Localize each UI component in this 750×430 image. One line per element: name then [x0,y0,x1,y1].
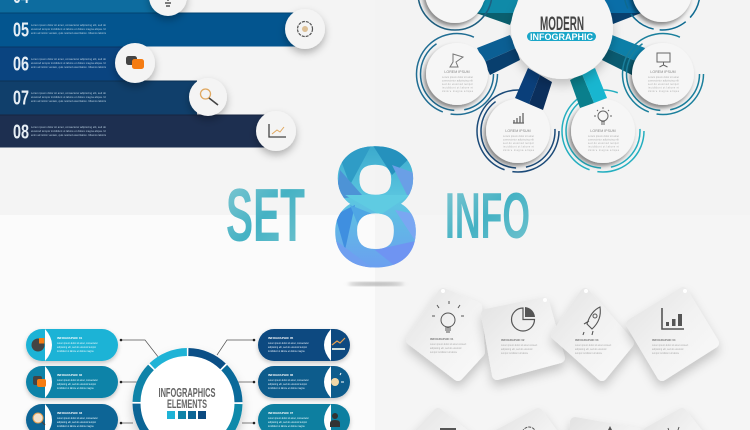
connector lines [120,339,255,424]
numeral shadow [348,282,404,286]
card 4: bar chart: adipiscing elit, sed do eiusmod [652,348,684,351]
pill 07: INFOGRAPHIC 07 [268,411,294,415]
pill 05: INFOGRAPHIC 05 [268,336,294,340]
ribbon 08: Lorem ipsum dolor sit amet, consectetur adipiscing elit, sed do [31,125,107,129]
ribbon 08: eiusmod tempor incididunt ut labore et dolore magna aliqua. Ut [31,129,106,133]
pill 07 [258,404,350,430]
card 3: rocket: adipiscing elit, sed do eiusmod [575,348,607,351]
node: top right [624,0,700,30]
headline: SET 8 INFO [227,146,529,286]
pill 06: INFOGRAPHIC 06 [268,373,294,377]
connector: top right [603,0,641,24]
node: bottom right with light bulb: incididunt ut labore et [588,146,619,148]
card 8 [648,413,703,430]
ring with title: ELEMENTS [167,397,207,411]
ribbon 07: eiusmod tempor incididunt ut labore et dolore magna aliqua. Ut [31,95,106,99]
word: INFO: INFO [445,179,530,252]
node: bottom right with light bulb: sed do eiusmod tempor [588,142,619,145]
pill 01: INFOGRAPHIC 01 [57,336,83,340]
card 2: pie chart: Lorem ipsum dolor sit amet consect [501,344,538,347]
pill 02: adipiscing elit, sed do eiusmod tempor [57,383,96,386]
ribbon 06: eiusmod tempor incididunt ut labore et dolore magna aliqua. Ut [31,61,106,65]
card 3: rocket: tempor incididunt ut labore [575,352,603,355]
panel: numbered ribbon steps [0,0,325,151]
icon: gear [285,9,325,49]
card 2: pie chart: tempor incididunt ut labore [501,352,529,355]
pill 03: Lorem ipsum dolor sit amet, consectetur [57,417,98,420]
hub: center circle with title: MODERN [540,14,584,35]
icon: line chart [256,111,296,151]
pill 01: adipiscing elit, sed do eiusmod tempor [57,346,96,349]
pill 06: incididunt ut labore et dolore magna [268,387,305,390]
card 3: rocket: Lorem ipsum dolor sit amet consect [575,344,612,347]
ribbon 06: enim ad minim veniam, quis nostrud exercitation. Ullamco laboris [31,65,107,69]
hub: center circle with title [511,0,613,79]
card 2: pie chart [486,298,560,375]
pill 03: incididunt ut labore et dolore magna [57,425,94,428]
ribbon 08 [0,114,266,148]
ribbon 06: Lorem ipsum dolor sit amet, consectetur adipiscing elit, sed do [31,57,107,61]
node: bottom right with light bulb: Lorem ipsum dolor sit amet [588,135,619,138]
icon: magnifier [189,78,227,116]
card 7 [572,422,638,430]
ribbon 04 [0,0,172,12]
ribbon 05: eiusmod tempor incididunt ut labore et dolore magna aliqua. Ut [31,27,106,31]
icon: light bulb [149,0,187,16]
connector: bottom right [570,68,607,108]
pill 03 [26,404,118,430]
connector: bottom left [515,68,552,110]
node: right with presentation board [622,34,704,114]
pill 02: INFOGRAPHIC 02 [57,373,83,377]
ribbon 07 [0,80,197,114]
card 2: pie chart: INFOGRAPHIC 02 [501,338,525,342]
card 3: rocket: INFOGRAPHIC 03 [575,338,599,342]
node: left with hourglass: incididunt ut labore et [442,86,473,90]
numeral 8 with low-poly fill [335,146,416,268]
node: bottom left with bar chart: Lorem ipsum dolor sit amet [503,135,534,138]
ribbon 05 [0,12,296,46]
node: bottom left with bar chart: dolore magna aliqua [503,149,535,152]
card 5 [408,413,478,430]
node: left with hourglass: consectetur adipiscing elit [442,80,473,82]
card 1: light bulb: INFOGRAPHIC 01 [430,337,454,341]
pill 05: Lorem ipsum dolor sit amet, consectetur [268,342,309,345]
node: right with presentation board: sed do eiusmod tempor [648,83,679,86]
pill 06: Lorem ipsum dolor sit amet, consectetur [268,379,309,382]
card 6: gear [497,413,565,430]
node: left with hourglass: dolore magna aliqua [442,90,474,93]
card 4: bar chart: Lorem ipsum dolor sit amet consect [652,344,689,347]
ribbon 05: enim ad minim veniam, quis nostrud exercitation. Ullamco laboris [31,31,107,35]
pill 07: incididunt ut labore et dolore magna [268,425,305,428]
pill 05 [258,329,350,361]
ribbon 08: enim ad minim veniam, quis nostrud exercitation. Ullamco laboris [31,133,107,137]
pill 01 [26,329,118,361]
card 1: light bulb: tempor incididunt ut labore [430,351,458,354]
pill 03: adipiscing elit, sed do eiusmod tempor [57,421,96,424]
node: bottom left with bar chart: consectetur adipiscing elit [503,138,534,142]
node: right with presentation board: dolore magna aliqua [648,90,680,93]
connector: left [477,35,520,75]
node: left with hourglass: LOREM IPSUM [444,70,470,74]
pill 02: incididunt ut labore et dolore magna [57,387,94,390]
pill 07: adipiscing elit, sed do eiusmod tempor [268,421,307,424]
node: left with hourglass: sed do eiusmod tempor [442,83,473,86]
card 1: light bulb: adipiscing elit, sed do eiusmod [430,347,462,350]
pill 05: incididunt ut labore et dolore magna [268,350,305,353]
node: bottom right with light bulb: LOREM IPSUM [590,129,616,133]
card 1: light bulb [411,289,480,376]
node: bottom right with light bulb: consectetur adipiscing elit [588,138,619,142]
connector: top left [476,0,518,25]
ribbon 05: 05 [13,20,29,42]
node: right with presentation board: LOREM IPSUM [650,70,676,74]
ring with title: INFOGRAPHICS [158,385,216,400]
pill 02: Lorem ipsum dolor sit amet, consectetur [57,379,98,382]
node: bottom right with light bulb [562,90,644,172]
ribbon 07: Lorem ipsum dolor sit amet, consectetur adipiscing elit, sed do [31,91,107,95]
card 2: pie chart: adipiscing elit, sed do eiusmod [501,348,533,351]
card 1: light bulb: Lorem ipsum dolor sit amet consect [430,343,467,346]
ribbon 08: 08 [13,122,29,144]
node: left with hourglass: Lorem ipsum dolor sit amet [442,76,473,79]
pill 05: adipiscing elit, sed do eiusmod tempor [268,346,307,349]
ring with title [132,348,242,430]
pill 02 [26,366,118,398]
ribbon 06: 06 [13,54,29,76]
panel: paper cards [408,289,714,430]
ribbon 07: 07 [13,88,29,110]
pill 06 [258,366,350,398]
card 4: bar chart [631,289,714,376]
panel: modern infographic hub [416,0,704,172]
pill 01: Lorem ipsum dolor sit amet, consectetur [57,342,98,345]
ribbon 06 [0,46,125,80]
node: left with hourglass [416,34,498,114]
card 4: bar chart: tempor incididunt ut labore [652,352,680,355]
pill 01: incididunt ut labore et dolore magna [57,350,94,353]
pill 06: adipiscing elit, sed do eiusmod tempor [268,383,307,386]
icon: speech bubbles [115,43,155,83]
node: right with presentation board: consectetur adipiscing elit [648,80,679,82]
connector: right [602,35,645,75]
pill 07: Lorem ipsum dolor sit amet, consectetur [268,417,309,420]
node: bottom left with bar chart [477,90,559,172]
node: bottom right with light bulb: dolore magna aliqua [588,149,620,152]
pill 03: INFOGRAPHIC 03 [57,411,83,415]
node: right with presentation board: incididunt ut labore et [648,86,679,90]
node: bottom left with bar chart: LOREM IPSUM [505,129,531,133]
word: SET: SET [226,173,305,257]
node: right with presentation board: Lorem ipsum dolor sit amet [648,76,679,79]
numeral 8 with low-poly fill: 8 [332,118,419,297]
node: bottom left with bar chart: incididunt ut labore et [503,146,534,148]
panel: infographics elements [26,329,350,430]
ribbon 05: Lorem ipsum dolor sit amet, consectetur adipiscing elit, sed do [31,23,107,27]
card 3: rocket [556,289,629,376]
node: top left [418,0,492,30]
ribbon 07: enim ad minim veniam, quis nostrud exercitation. Ullamco laboris [31,99,107,103]
hub: center circle with title: INFOGRAPHIC [530,32,594,42]
card 4: bar chart: INFOGRAPHIC 04 [652,338,676,342]
node: bottom left with bar chart: sed do eiusmod tempor [503,142,534,145]
